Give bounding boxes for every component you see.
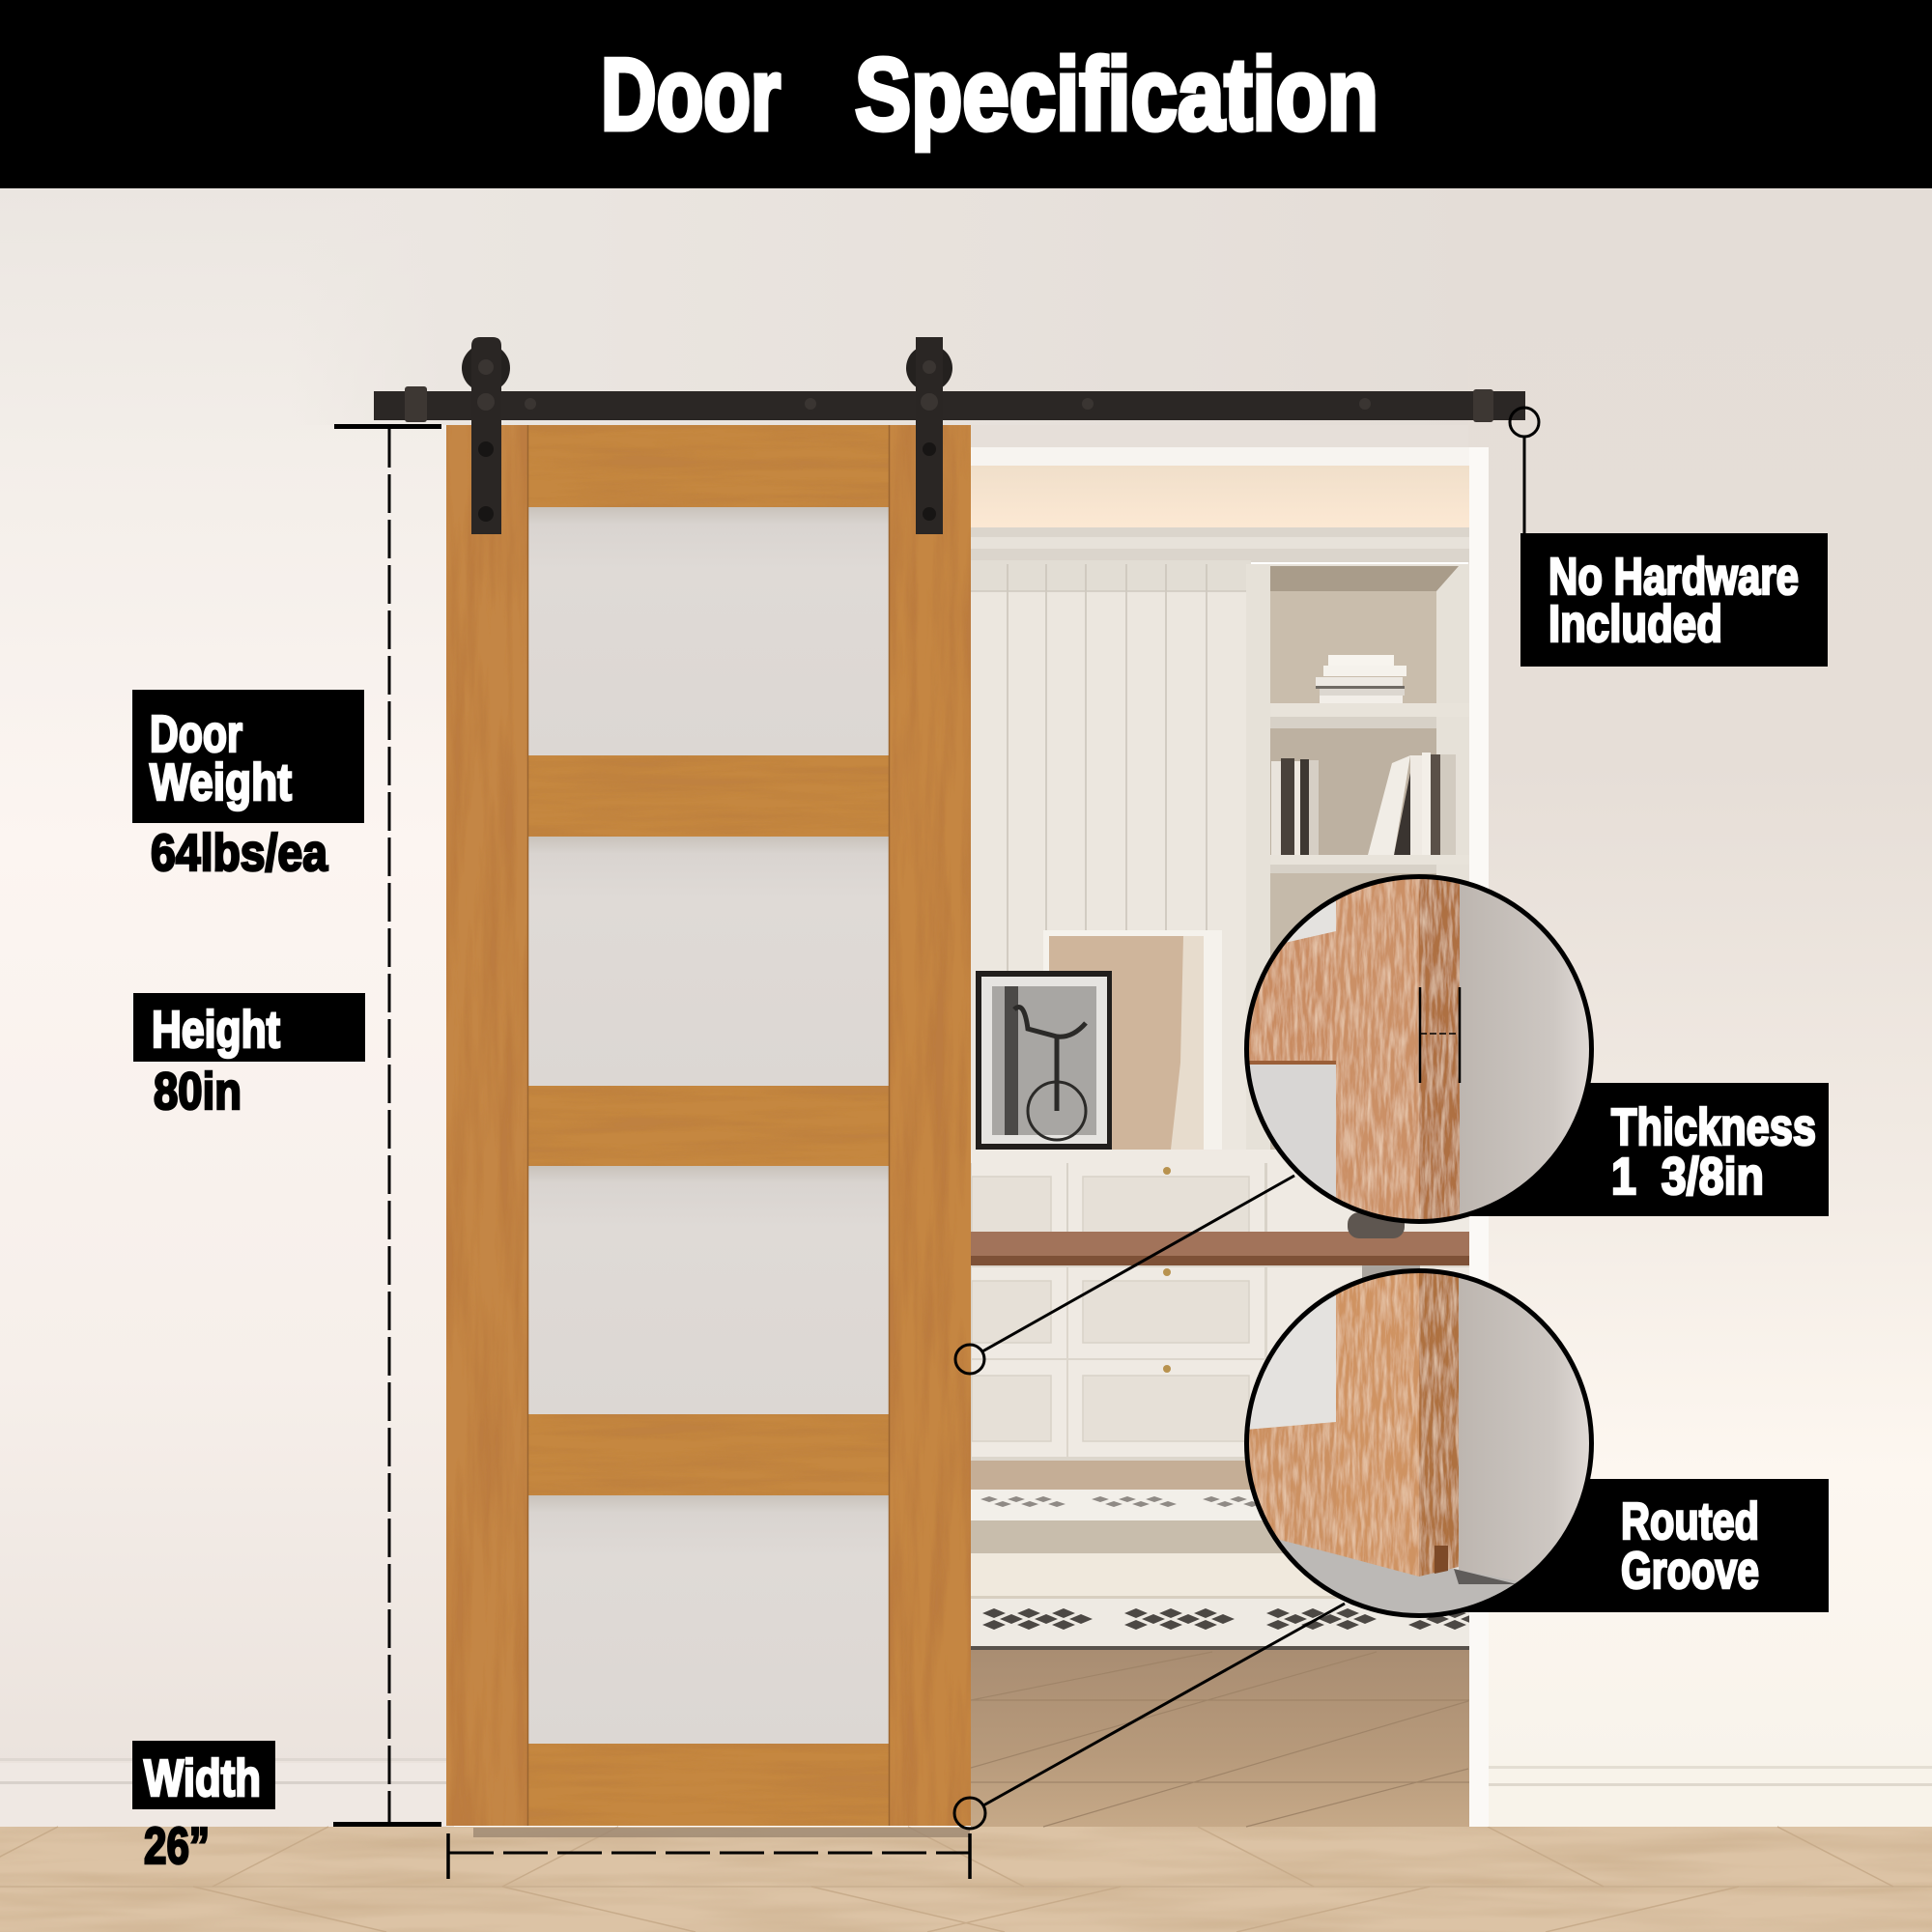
value: height: 80in (154, 1063, 242, 1121)
door shadow on floor (473, 1828, 970, 1837)
label: thickness: 1 3/8in (1611, 1148, 1764, 1206)
ceiling (971, 466, 1469, 531)
rails (527, 425, 890, 1826)
room floor and rug (971, 1461, 1469, 1650)
door (446, 425, 971, 1837)
doorway interior room (971, 447, 1489, 1827)
callout leader: hardware (1510, 408, 1539, 533)
label: no hardware included: No Hardware (1548, 548, 1799, 606)
label: thickness: Thickness (1611, 1098, 1816, 1156)
room wood floor (971, 1650, 1469, 1827)
label: door weight: Weight (150, 753, 292, 811)
width dimension line (448, 1833, 970, 1879)
wheels (462, 344, 952, 392)
inset: routed groove close-up (1246, 1265, 1594, 1623)
label: routed groove: Groove (1621, 1542, 1759, 1600)
label: routed groove: Routed (1621, 1492, 1759, 1550)
label: no hardware included: Included (1548, 595, 1722, 653)
title: Specification (855, 38, 1378, 152)
strap bolts (478, 441, 936, 522)
label: door weight (132, 690, 364, 823)
rail (374, 391, 1525, 420)
label: no hardware included (1520, 533, 1828, 667)
value: door weight: 64lbs/ea (151, 824, 328, 882)
label: thickness (1430, 1083, 1829, 1216)
label: height: Height (152, 1001, 280, 1059)
height dimension line (333, 424, 441, 1827)
hanger straps (471, 337, 943, 534)
value: width: 26” (144, 1817, 210, 1875)
stoppers (405, 386, 1493, 422)
header bar (0, 0, 1932, 188)
label: door weight: Door (150, 705, 242, 763)
label: routed groove (1430, 1479, 1829, 1612)
title: Door (601, 38, 781, 152)
bookshelf (1246, 564, 1469, 1163)
thickness marks (1420, 987, 1460, 1083)
title (601, 38, 1378, 152)
crown molding (971, 527, 1469, 562)
cabinets (971, 1150, 1469, 1461)
countertop (971, 1232, 1469, 1265)
callout leader: thickness (955, 1176, 1294, 1374)
label: width: Width (144, 1749, 261, 1807)
left stile (446, 425, 527, 1826)
panelled wall (971, 560, 1251, 1159)
track bolts (525, 398, 1371, 410)
stile seams (527, 425, 889, 1826)
books: stacked (1316, 655, 1406, 703)
floor (0, 1827, 1932, 1932)
vase on countertop (1348, 1212, 1420, 1279)
artwork: bicycle photo (976, 971, 1112, 1150)
door jamb (971, 447, 1489, 1827)
callout leader: routed groove (954, 1604, 1345, 1829)
baseboard (0, 1758, 1932, 1827)
glass panes (527, 507, 891, 1744)
inset: door thickness close-up (1246, 875, 1594, 1227)
label: height (133, 993, 365, 1062)
right stile (890, 425, 971, 1826)
barn door track hardware (374, 337, 1525, 534)
artwork: beige print (1043, 930, 1222, 1150)
books: upright (1271, 753, 1456, 855)
